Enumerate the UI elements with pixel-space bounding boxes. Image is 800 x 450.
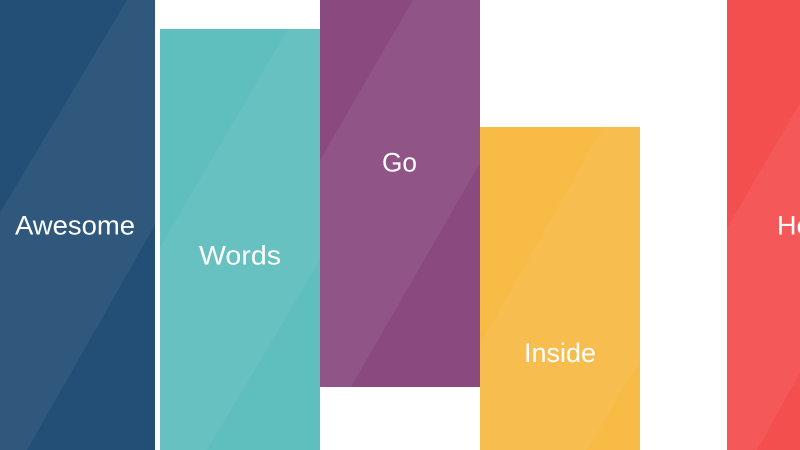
panel: Go	[320, 0, 480, 387]
panel: Go: Go	[382, 148, 417, 178]
panel: Words: Words	[199, 240, 281, 270]
panel: Awesome: Awesome	[15, 210, 135, 240]
panel: Inside: Inside	[524, 338, 596, 368]
panel: Inside	[480, 127, 640, 450]
panel: Words	[160, 29, 320, 450]
panel: He (cropped)	[727, 0, 800, 450]
panel: Awesome	[0, 0, 155, 450]
